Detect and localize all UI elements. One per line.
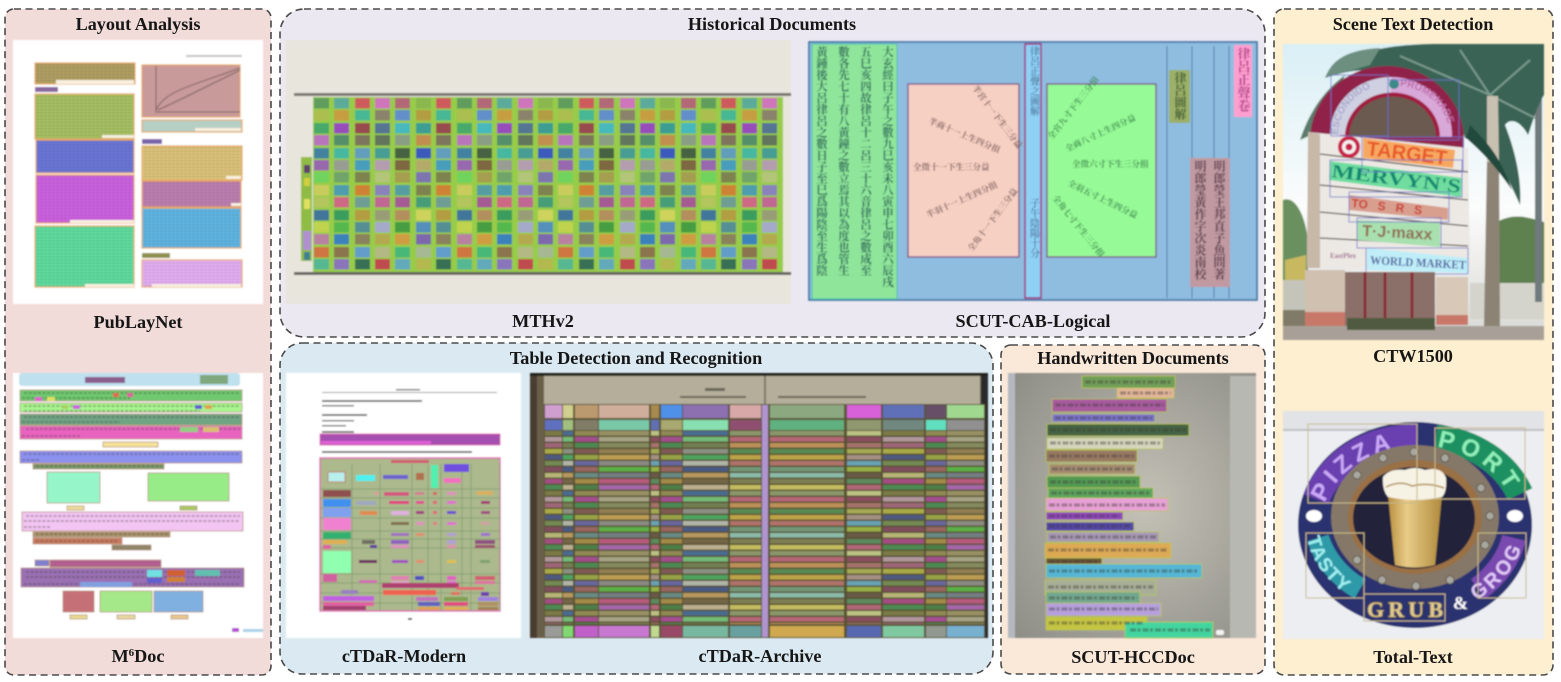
- porthole: [1331, 445, 1499, 589]
- arch text: ESCONDIDO: [1330, 82, 1370, 135]
- image: SCUT-CAB-Logical book page with logical regions: 明郎瑩王邦直子魚問著: [1212, 160, 1226, 281]
- image: Total-Text round pub sign with text polygons: PORT: [1438, 430, 1522, 486]
- image: CTW1500 storefront sign with text polygons: [1282, 42, 1546, 341]
- image: MTHv2 manuscript with character boxes: [286, 40, 791, 304]
- radial text: right diagram: [1046, 74, 1149, 259]
- radial text: left diagram: 半宮十一下生三分益: [970, 83, 1025, 151]
- image: CTW1500 storefront sign with text polygons: T·J·maxx: [1362, 223, 1433, 244]
- image: CTW1500 storefront sign with text polygons: EastPlex: [1330, 252, 1357, 260]
- radial text: left diagram: [913, 83, 1025, 253]
- text region boxes: [1330, 75, 1468, 274]
- radial text: right diagram: 全角七寸下生三分損: [1050, 193, 1107, 259]
- sign board: [1307, 132, 1470, 268]
- radial text: left diagram: 全角十一下生三分益: [966, 186, 1020, 253]
- image: Total-Text round pub sign with text polygons: GROG: [1470, 544, 1520, 598]
- base: [1305, 270, 1345, 312]
- image: SCUT-CAB-Logical book page with logical regions: 律呂正聲卷: [1236, 46, 1250, 112]
- caption: Total-Text: Total-Text: [1373, 647, 1453, 667]
- heading: Table Detection and Recognition: Table Detection and Recognition: [510, 348, 762, 368]
- radial text: left diagram: 半商十一上生四分損: [927, 116, 1002, 155]
- heading: Handwritten Documents: Handwritten Documents: [1037, 348, 1229, 368]
- image: Total-Text round pub sign with text polygons: GRUB: [1367, 597, 1443, 622]
- text region boxes: [1306, 424, 1526, 621]
- image: Total-Text round pub sign with text polygons: TASTY: [1307, 534, 1352, 590]
- caption: CTW1500: CTW1500: [1373, 346, 1453, 366]
- panel: Handwritten Documents: [1001, 345, 1265, 674]
- caption: SCUT-CAB-Logical: SCUT-CAB-Logical: [956, 311, 1110, 331]
- image: cTDaR-Modern printed table: [286, 373, 521, 638]
- heading: Scene Text Detection: Scene Text Detection: [1333, 14, 1493, 34]
- panel: Table Detection and Recognition: [280, 343, 993, 674]
- radial text: left diagram: 全徵十一下生三分益: [913, 162, 990, 172]
- heading: Historical Documents: Historical Documents: [688, 14, 856, 34]
- image: PubLayNet page with layout regions: [13, 40, 263, 304]
- radial text: right diagram: 全商八寸上生四分益: [1064, 112, 1138, 154]
- vertical text columns: 五巳亥四故律呂十二呂三十六音律呂之數成至: [859, 46, 872, 276]
- radial text: right diagram: 全徵六寸下生三分損: [1072, 159, 1149, 169]
- image: CTW1500 storefront sign with text polygons: MERVYN'S: [1330, 161, 1462, 198]
- image: Total-Text round pub sign with text polygons: [1282, 410, 1544, 640]
- vertical text columns: 黃鍾後大呂律呂之數日子至巳爲陽陰至生爲陰: [815, 45, 828, 277]
- image: SCUT-CAB-Logical book page with logical regions: 律呂正聲之圖解: [1028, 45, 1040, 117]
- image: CTW1500 storefront sign with text polygons: WORLD MARKET: [1370, 253, 1466, 272]
- image: CTW1500 storefront sign with text polygons: TO S R S: [1351, 196, 1423, 217]
- image: Total-Text round pub sign with text polygons: &: [1453, 593, 1468, 613]
- panel: Scene Text Detection: [1273, 8, 1554, 676]
- radial text: right diagram: 全宮九寸下生三分損: [1046, 74, 1101, 141]
- panel: Historical Documents: [280, 9, 1265, 337]
- image: CTW1500 storefront sign with text polygons: TARGET: [1365, 138, 1448, 170]
- image: cTDaR-Archive ledger table: [530, 373, 988, 638]
- caption: M6Doc: M: [112, 646, 129, 666]
- image: SCUT-CAB-Logical book page with logical regions: 律呂圖解: [1173, 71, 1187, 121]
- radial text: left diagram: 半羽十一上生四分損: [925, 179, 999, 220]
- vertical text columns: [815, 45, 894, 288]
- arch: [1310, 66, 1464, 148]
- radial text: right diagram: 全羽五寸上生四分益: [1066, 178, 1140, 221]
- caption: cTDaR-Modern: cTDaR-Modern: [342, 646, 466, 666]
- image: SCUT-CAB-Logical book page with logical regions: 子午陰陽十分: [1028, 198, 1040, 259]
- heading: Layout Analysis: Layout Analysis: [76, 14, 200, 34]
- panel: Layout Analysis: [5, 9, 271, 675]
- image: M6Doc page with layout regions: [13, 373, 263, 638]
- image: SCUT-HCCDoc handwriting with line boxes: [1008, 373, 1256, 638]
- caption: SCUT-HCCDoc: SCUT-HCCDoc: [1071, 647, 1195, 667]
- vertical text columns: 大玄經曰子午之數九巳亥未八寅申七卯酉六辰戌: [881, 45, 894, 288]
- beer glass: [1388, 495, 1442, 568]
- caption: M6Doc: 6: [129, 647, 135, 659]
- vertical text columns: 數各先七十有八黃鐘之數立焉其以為度也管生: [837, 45, 850, 276]
- image: Total-Text round pub sign with text polygons: PIZZA: [1310, 434, 1391, 502]
- image: CTW1500 storefront sign with text polygons: PROMENADE: [1400, 79, 1455, 124]
- image: SCUT-CAB-Logical book page with logical regions: [809, 42, 1257, 300]
- band text: [1325, 447, 1418, 503]
- caption: M6Doc: Doc: [134, 646, 164, 666]
- caption: cTDaR-Archive: cTDaR-Archive: [699, 646, 821, 666]
- caption: PubLayNet: PubLayNet: [94, 312, 182, 332]
- lettering bands: [1316, 438, 1417, 499]
- caption: MTHv2: MTHv2: [512, 311, 574, 331]
- image: SCUT-CAB-Logical book page with logical regions: 明郎瑩黃作字次炎南校: [1192, 160, 1207, 281]
- bullseye logo: [1338, 136, 1360, 158]
- background palms: [1283, 199, 1308, 320]
